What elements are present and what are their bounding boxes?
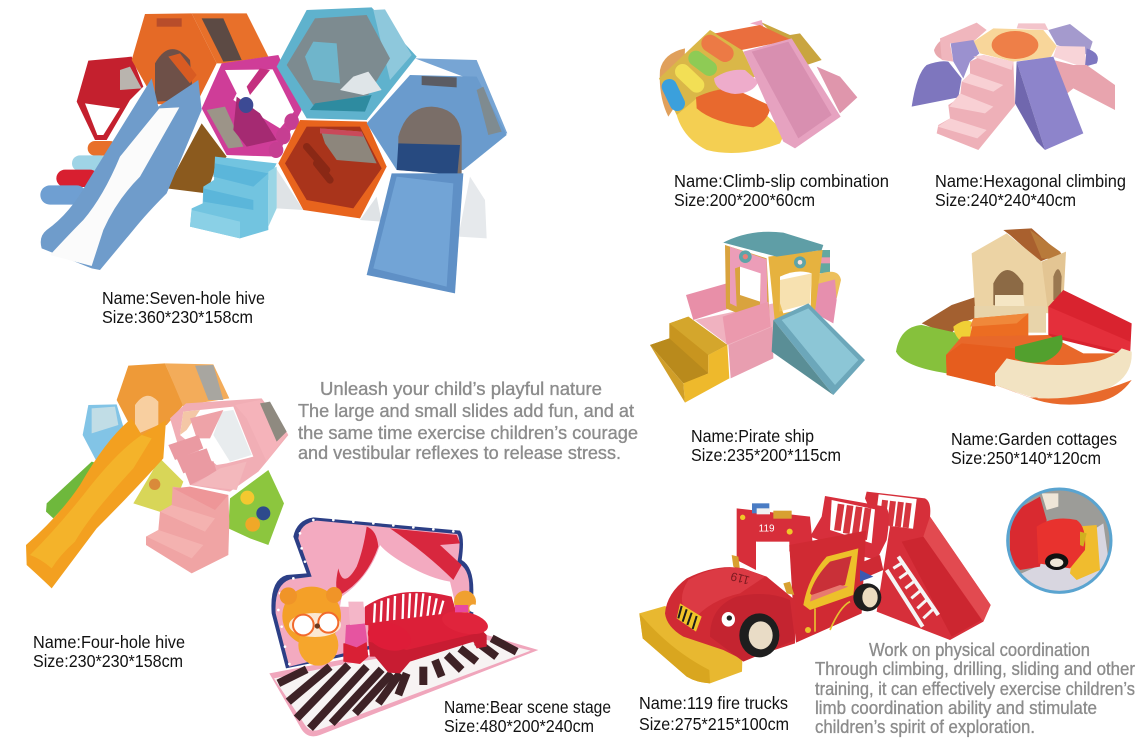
label: four-hole hive: Size:230*230*158cm <box>33 651 183 671</box>
product: 119 fire truck <box>639 492 991 683</box>
label: pirate ship: Name:Pirate ship <box>691 426 814 446</box>
label: garden cottages: Size:250*140*120cm <box>951 448 1101 468</box>
text block: playful nature: The large and small slides add fun, and at <box>298 400 634 421</box>
product: 119 fire truck: 119 <box>729 569 751 588</box>
label: garden cottages: Name:Garden cottages <box>951 429 1117 449</box>
text block: playful nature <box>298 378 638 463</box>
label: seven-hole hive <box>102 288 265 327</box>
rollers <box>50 148 110 195</box>
label: four-hole hive: Name:Four-hole hive <box>33 632 185 652</box>
product: four-hole hive <box>26 363 288 588</box>
text block: playful nature: and vestibular reflexes to release stress. <box>298 442 621 463</box>
label: garden cottages <box>951 429 1117 468</box>
label: seven-hole hive: Name:Seven-hole hive <box>102 288 265 308</box>
label: pirate ship: Size:235*200*115cm <box>691 445 841 465</box>
label: 119 fire trucks: Size:275*215*100cm <box>639 714 789 734</box>
label: hexagonal climbing: Name:Hexagonal climbing <box>935 171 1126 191</box>
product: 119 fire truck: 119 <box>759 524 775 535</box>
label: seven-hole hive: Size:360*230*158cm <box>102 307 253 327</box>
product: seven-hole hive <box>41 7 507 293</box>
label: hexagonal climbing: Size:240*240*40cm <box>935 190 1076 210</box>
label: climb-slip combination: Name:Climb-slip combination <box>674 171 889 191</box>
product: pirate ship <box>650 232 865 403</box>
label: climb-slip combination <box>674 171 889 210</box>
label: climb-slip combination: Size:200*200*60cm <box>674 190 815 210</box>
text block: physical coordination: limb coordination ability and stimulate <box>815 697 1097 718</box>
label: 119 fire trucks <box>639 693 789 734</box>
text block: physical coordination: Work on physical coordination <box>869 639 1090 660</box>
text block: physical coordination <box>815 639 1135 737</box>
inset: fire truck detail photo <box>1007 487 1113 597</box>
text block: physical coordination: children’s spirit of exploration. <box>815 716 1035 737</box>
product: hexagonal climbing <box>912 23 1115 150</box>
label: bear scene stage: Size:480*200*240cm <box>444 716 594 736</box>
label: bear scene stage: Name:Bear scene stage <box>444 697 611 717</box>
product: garden cottages <box>896 228 1132 405</box>
label: hexagonal climbing <box>935 171 1126 210</box>
text block: playful nature: Unleash your child’s playful nature <box>320 378 602 399</box>
product: climb-slip combination <box>659 20 857 153</box>
product: bear scene stage <box>269 517 538 736</box>
label: bear scene stage <box>444 697 611 736</box>
label: pirate ship <box>691 426 841 465</box>
label: four-hole hive <box>33 632 185 671</box>
text block: playful nature: the same time exercise children’s courage <box>298 422 638 443</box>
label: 119 fire trucks: Name:119 fire trucks <box>639 693 788 713</box>
